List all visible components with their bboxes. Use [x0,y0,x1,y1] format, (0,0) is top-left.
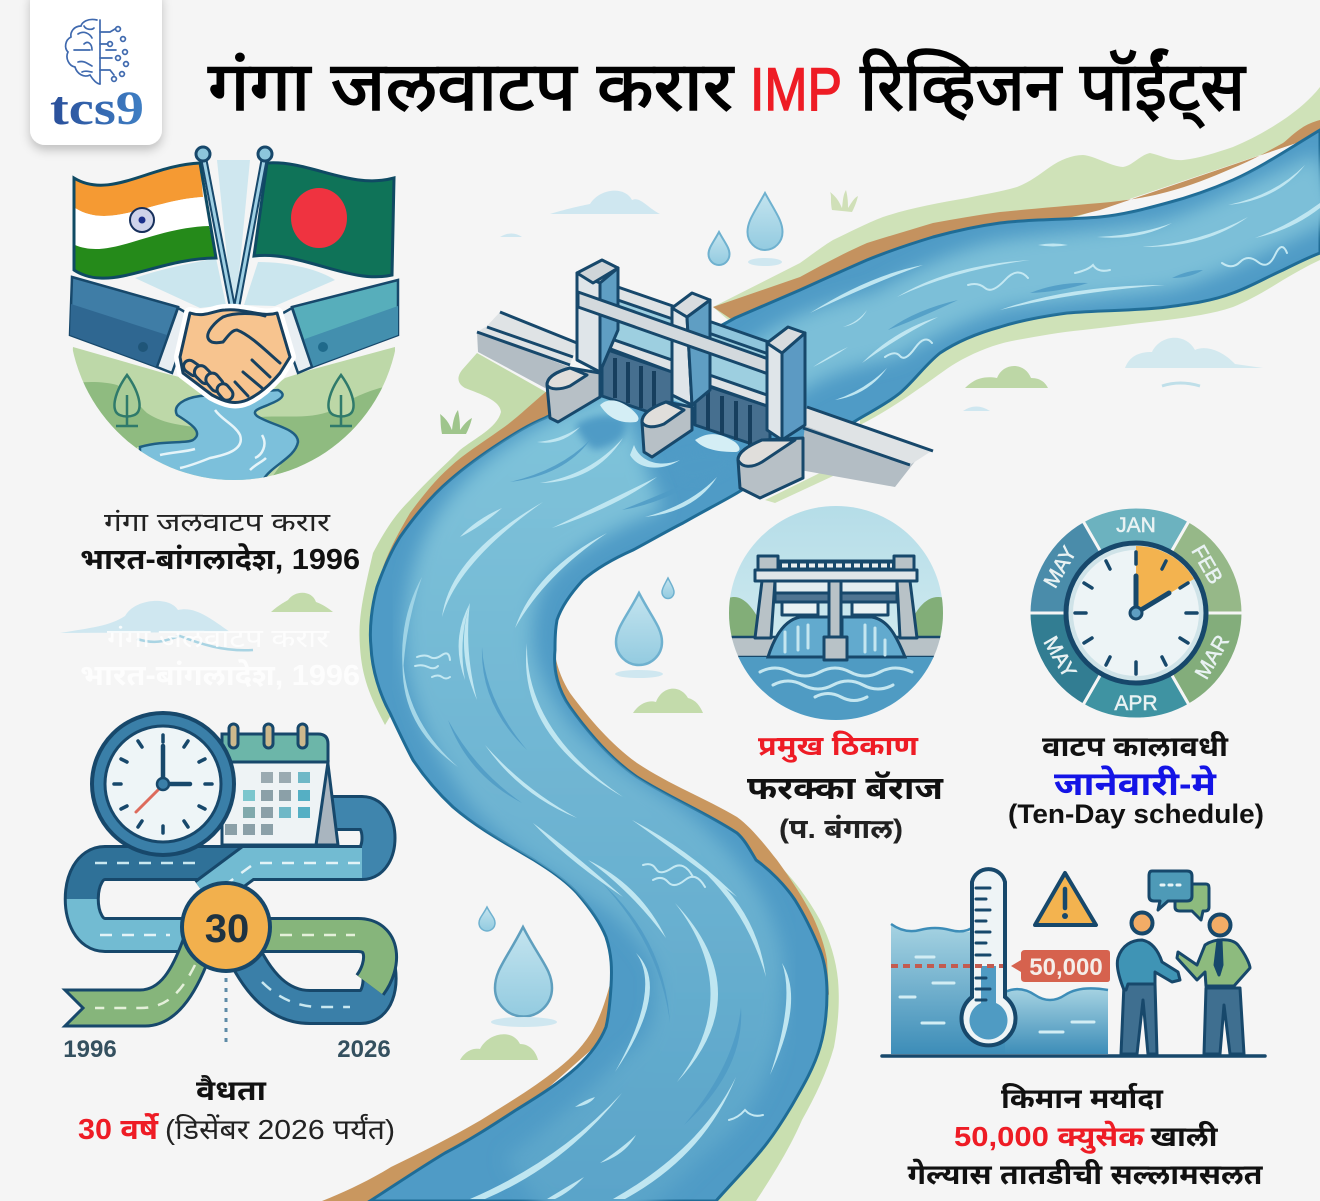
green cloud middle [633,689,703,713]
water drop tiny [662,578,674,598]
title text black end: रिव्हिजन पॉईंट्स [860,49,1246,129]
IMP: IMP [750,56,842,123]
30 years: 30 वर्षे [78,1113,160,1146]
right arm [278,280,398,373]
tcs9 wordmark: tcs9 [50,82,144,135]
brown bank left bottom [322,980,625,1201]
calendar [222,724,338,845]
ribbon road green left [65,940,212,1026]
middle gate rails [600,335,672,372]
gate bars [615,358,750,445]
ghost text [80,623,360,692]
until december: (डिसेंबर 2026 पर्यंत) [165,1113,395,1145]
right pier [767,327,805,440]
schedule clock [1029,507,1243,719]
dotted line [224,978,228,1046]
decorations: clouds, drops, grass [60,190,1263,1060]
pier nose left [547,368,600,422]
ribbon road green right [262,935,380,985]
brain icon [66,19,128,84]
month sectors [1029,507,1243,719]
clock rim [1066,543,1206,683]
treaty illustration [60,147,400,495]
water tank right surface [1005,988,1108,1000]
water drop bottom [495,927,552,1017]
warning icon [1035,873,1096,925]
caption line: गंगा जलवाटप करार [104,507,332,537]
barrage name: फरक्का बॅराज [747,770,944,806]
water drop large [748,193,782,250]
below: खाली [1150,1120,1218,1152]
dark water strokes [448,270,1203,1125]
cloud top [550,191,660,214]
clock [92,713,234,855]
1996: 1996 [63,1036,117,1063]
farakka barrage circle [725,506,950,722]
green bank under upper channel [860,240,1320,425]
dam structure [755,556,917,660]
scene background [60,160,400,495]
grass tuft left [440,410,472,434]
water tank left surface [891,924,975,931]
green cloud left [271,593,333,612]
green cloud bottom [460,1034,538,1060]
clock center [1130,607,1142,619]
spillways [768,617,905,657]
tiny cloud right [963,406,990,411]
pier nose middle [642,402,692,457]
timeline illustration [63,713,391,1063]
minimum flow illustration [882,869,1265,1056]
brown bank right [555,655,829,995]
month labels: MAY [1039,542,1081,592]
ground line [882,1054,1265,1058]
ten-day schedule: (Ten-Day schedule) [1008,799,1264,829]
logo card [30,0,162,145]
brown bank left top [374,390,580,600]
ghost line 1: गंगा जलवाटप करार [107,623,331,653]
river illustration [322,87,1320,1201]
30 badge [182,883,270,971]
2026: 2026 [337,1036,391,1063]
minimum flow caption [908,1082,1263,1190]
water drop bottom small [479,907,495,931]
thermometer [961,869,1016,1045]
orange wedge [1136,546,1194,613]
title text black part: गंगा जलवाटप करार [208,49,734,125]
green bank upper [713,87,1320,330]
west bengal: (प. बंगाल) [779,814,903,844]
middle pier [672,293,710,405]
caption bold: भारत-बांगलादेश, 1996 [80,542,360,576]
green bank left [360,353,560,725]
ghost line 2: भारत-बांगलादेश, 1996 [80,658,360,692]
50,000 flag: 50,000 [1029,954,1103,981]
hills [725,597,950,640]
water [738,657,934,720]
back loop upper right [325,813,378,863]
green bank near road [765,468,846,503]
50,000 cusecs: 50,000 क्युसेक [954,1119,1145,1154]
urgent consultation: गेल्यास तातडीची सल्लामसलत [908,1157,1263,1190]
bangladesh flag [254,163,394,277]
month labels: MAY [1039,632,1081,682]
long beam [578,292,777,377]
spray [600,400,740,452]
pier nose right [738,438,803,498]
gates backdrop [590,280,790,440]
month labels: MAR [1191,631,1234,683]
speech bubbles [1149,871,1209,920]
person right [1177,914,1250,1054]
water drop small [708,232,730,265]
ribbon road lower dark [240,945,380,1007]
left pier [577,260,618,372]
validity caption [78,1074,395,1146]
wave lines [760,625,912,700]
bank [725,637,950,657]
blue cloud right [1125,338,1263,368]
drop shadow bottom [491,1017,557,1027]
rail dots [782,564,892,568]
india flag [74,163,216,278]
jan to may: जानेवारी-मे [1054,764,1217,802]
water body [370,130,1320,1201]
spillway dark patches [574,412,628,452]
water lighter core [468,185,1320,1201]
water drop middle [616,593,662,665]
sky [729,506,943,720]
month labels [1039,514,1234,715]
50,000 flag [1011,950,1110,982]
green bank lower right [700,870,839,1201]
clock face [1073,550,1199,676]
validity heading: वैधता [196,1074,267,1106]
treaty caption [80,507,360,576]
right road [800,407,933,487]
green cloud right [965,366,1048,388]
blue cloud left [60,601,230,633]
rear beams [612,285,690,325]
water tank right [1005,988,1108,1054]
ribbon road left upper [82,863,250,935]
wave line left [137,636,253,650]
water ripples [415,247,1287,1120]
title [208,49,1246,129]
left arm [70,277,192,373]
month labels: FEB [1187,541,1227,588]
minimum limit: किमान मर्यादा [1001,1082,1164,1114]
right tree [328,375,354,426]
ribbon road right upper [205,863,362,895]
left tree [114,375,140,426]
drop shadow ellipse [748,258,782,266]
spillway swirl [630,445,680,468]
handshake [180,310,290,403]
main location label: प्रमुख ठिकाण [758,731,919,762]
barrage illustration [477,260,933,498]
30 badge: 30 [205,907,249,951]
left road [477,312,577,388]
brown bank upper [713,120,1320,325]
tiny ripple right [1162,383,1200,386]
farakka caption [747,731,944,844]
sluice gate right [695,382,770,450]
light water strokes [402,165,1320,1199]
month labels: APR [1114,692,1158,715]
drop shadow middle [615,670,663,678]
schedule caption [1008,730,1264,829]
dotted threshold line [891,964,1003,968]
water ripples [900,957,1094,1032]
small cloud [500,234,522,237]
sluice gate left [602,348,672,420]
grass tuft top [830,190,858,212]
person left [1117,912,1180,1054]
clock ticks and hands [1075,552,1197,674]
card [30,0,162,145]
flag poles [196,147,272,305]
month labels: JAN [1116,514,1156,537]
allocation period: वाटप कालावधी [1042,730,1229,762]
water tank left [891,924,1005,1054]
